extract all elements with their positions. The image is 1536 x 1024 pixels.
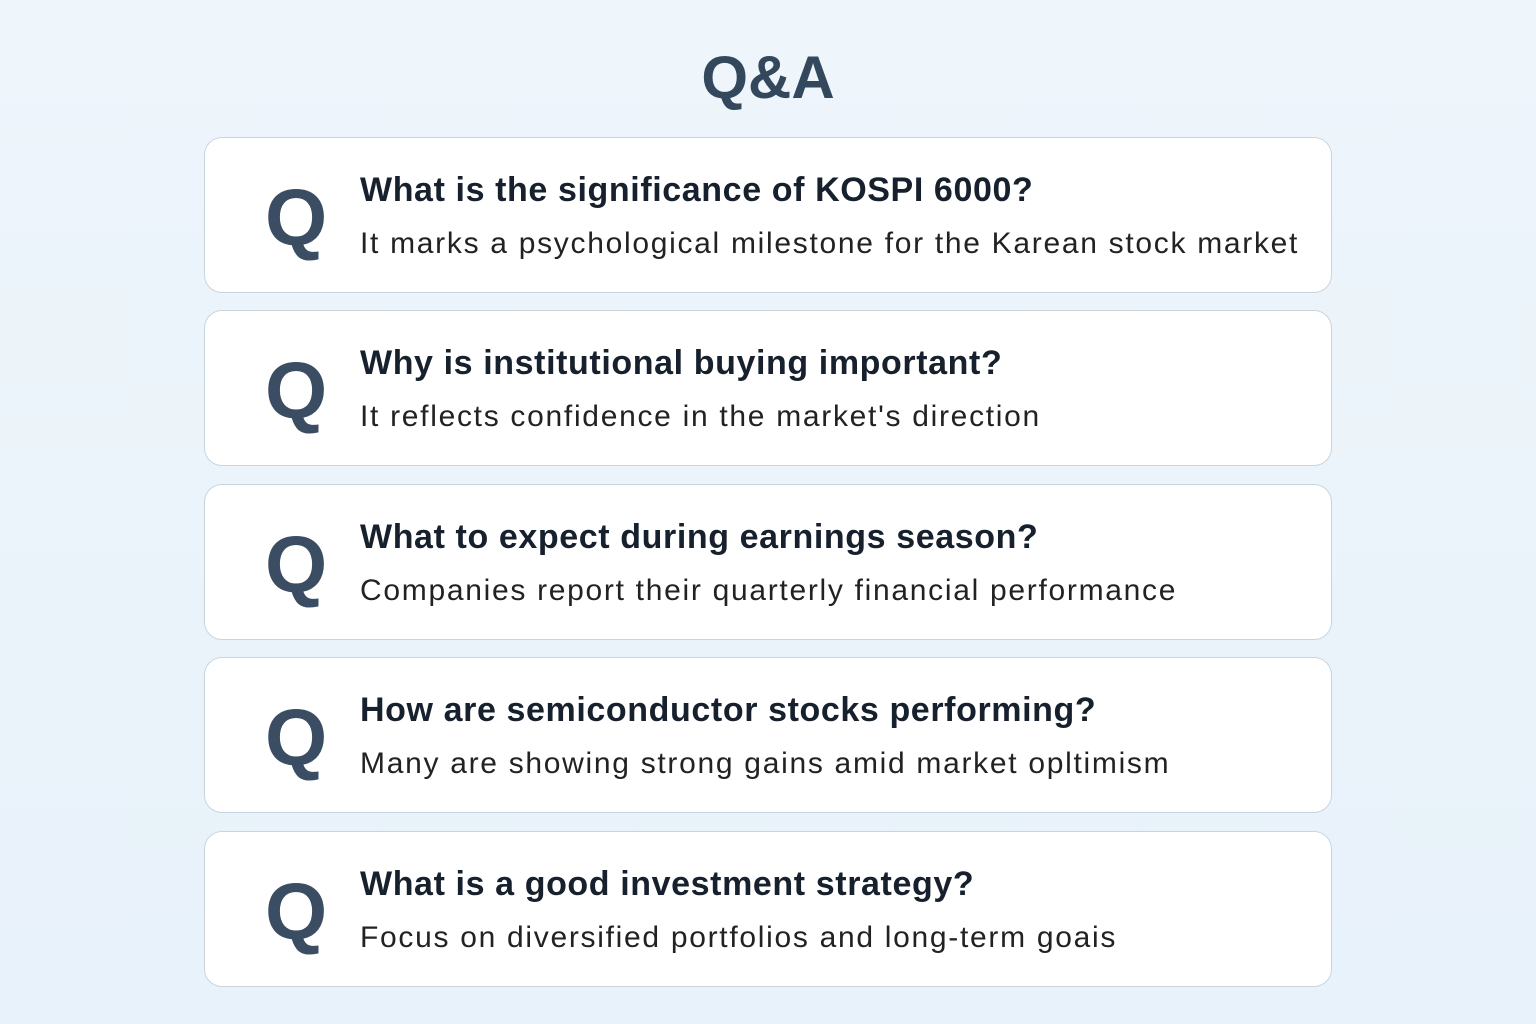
- question: Why is institutional buying important?: [360, 344, 1002, 382]
- icon: Q: Q: [265, 173, 327, 262]
- card: institutional buying: [204, 310, 1332, 466]
- card: KOSPI 6000: [204, 137, 1332, 293]
- icon: Q: Q: [265, 693, 327, 782]
- question: What to expect during earnings season?: [360, 518, 1038, 556]
- question: How are semiconductor stocks performing?: [360, 691, 1096, 729]
- answer: It reflects confidence in the market's direction: [360, 400, 1041, 433]
- card: investment strategy: [204, 831, 1332, 987]
- answer: Focus on diversified portfolios and long-term goais: [360, 921, 1117, 954]
- icon: Q: Q: [265, 346, 327, 435]
- question: What is the significance of KOSPI 6000?: [360, 171, 1033, 209]
- card: semiconductor stocks: [204, 657, 1332, 813]
- question: What is a good investment strategy?: [360, 865, 974, 903]
- icon: Q: Q: [265, 867, 327, 956]
- answer: Companies report their quarterly financial performance: [360, 574, 1177, 607]
- title: Q&A: [701, 44, 835, 111]
- answer: It marks a psychological milestone for the Karean stock market: [360, 227, 1299, 260]
- icon: Q: Q: [265, 520, 327, 609]
- answer: Many are showing strong gains amid market opltimism: [360, 747, 1170, 780]
- card: earnings season: [204, 484, 1332, 640]
